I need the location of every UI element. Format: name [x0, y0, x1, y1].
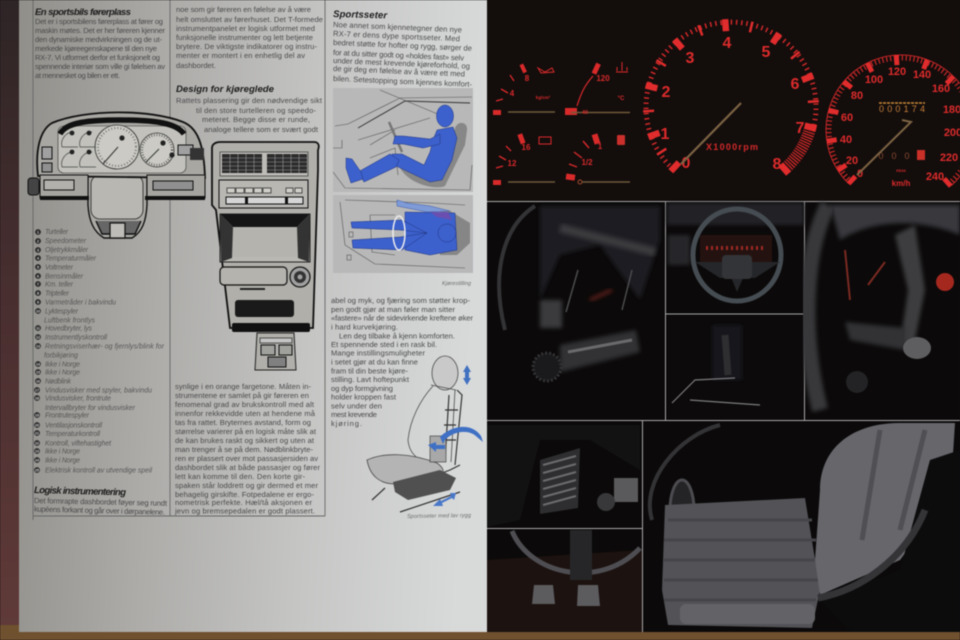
- speed unit label: km/h: [892, 179, 910, 188]
- caption: Sportsseter med lav rygg: Sportsseter med lav rygg: [407, 513, 472, 520]
- gauge: water temperature: 40: [582, 110, 588, 116]
- speedo numbers: 240: [926, 171, 944, 183]
- legend: numbered instrument list: 18: [35, 396, 39, 400]
- text block: seat comfort: holder kroppen fast: [331, 392, 397, 402]
- legend: numbered instrument list: 1: [37, 230, 39, 234]
- text block: seat comfort: og dyp formgivning: [331, 384, 393, 393]
- photo grid lines: [487, 202, 960, 632]
- text block: column two bottom: jevn og bremsepedalen er godt plassert.: [174, 506, 315, 516]
- legend: numbered instrument list: Intervallbryter for vindusvisker: [45, 405, 136, 412]
- gauge: fuel: [566, 133, 630, 184]
- text block: column two bottom: man trenger å se på dem. Nødblinkbryte-: [175, 445, 313, 454]
- gauge: speedometer: [826, 55, 960, 188]
- gauge: fuel: 1: [598, 142, 603, 151]
- gauge: voltmeter: 12: [508, 159, 517, 168]
- steering wheel: [389, 122, 402, 152]
- text block: column two bottom: størrelse varierer på en logisk måte slik at: [175, 427, 317, 436]
- legend: numbered instrument list: Kontroll, viftehastighet: [45, 440, 112, 448]
- speedo numbers: 120: [888, 66, 906, 78]
- speedo numbers: 20: [846, 155, 858, 167]
- legend: numbered instrument list: forbikjøring: [44, 352, 78, 360]
- gauge: water temperature: [565, 62, 630, 116]
- legend: numbered instrument list: Lyktespyler: [45, 308, 79, 316]
- trip counter: [878, 150, 925, 161]
- legend: numbered instrument list: Ikke i Norge: [45, 458, 80, 464]
- text block: sports seats intro: for at du sitter godt og «holdes fast» selv: [333, 48, 464, 62]
- seat frame: [372, 390, 462, 512]
- text block: logisk instrumentering: Det formrapte dashbordet føyer seg rundt: [34, 496, 168, 508]
- text block: intro: merkede kjøreegenskapene til den nye: [35, 44, 157, 53]
- text block: logisk instrumentering: kupéens forkant og går over i dørpanelene.: [34, 505, 165, 517]
- console climate panel: [219, 180, 308, 208]
- legend: numbered instrument list: Varmetråder i bakvindu: [45, 298, 116, 306]
- text block: sports seats intro: [333, 20, 473, 89]
- heading: Design for kjøreglede: Design for kjøreglede: [176, 84, 275, 95]
- photo: pedals and wheel rim: [487, 530, 642, 632]
- text block: column two bottom: de kan brukes raskt og sikkert og uten at: [175, 436, 315, 445]
- speedo minor ticks: [829, 58, 960, 184]
- dial panel: [58, 126, 186, 173]
- gauge: oil pressure: 4: [510, 89, 515, 98]
- legend: numbered instrument list: 15: [36, 370, 40, 374]
- text block: column two bottom: nometrisk perfekte. Hæl/tå aksjonen er: [175, 498, 312, 507]
- seat, side view: [400, 123, 467, 187]
- text block: seat comfort: i hard kurvekjøring.: [331, 322, 398, 332]
- text block: seat comfort: i setet gjør at du kan finne: [331, 358, 418, 366]
- legend: numbered instrument list: 4: [37, 256, 39, 260]
- left page: [19, 0, 488, 632]
- seat outline: [367, 356, 458, 484]
- text block: design intro: til den store turtelleren og speedo-: [196, 106, 316, 115]
- legend: numbered instrument list: [34, 229, 165, 474]
- text block: seat comfort: fram til din beste kjøre-: [331, 366, 408, 376]
- dial: tachometer: [95, 125, 139, 169]
- text block: sports seats intro: bedret støtte for hofter og rygg, sørger de: [333, 38, 472, 53]
- gauge: tachometer: [643, 19, 819, 176]
- tach unit label: X1000rpm: [706, 142, 758, 152]
- legend: numbered instrument list: Frontrutespyler: [45, 412, 90, 420]
- legend: numbered instrument list: 8: [37, 291, 39, 295]
- legend: numbered instrument list: Bensinmåler: [45, 272, 84, 280]
- arrow: backrest recline: [440, 427, 483, 444]
- blue figure from above: [351, 200, 457, 255]
- legend: numbered instrument list: Hovedbryter, lys: [45, 326, 93, 332]
- text block: column two bottom: fenomenal grad av brukskontroll med alt: [175, 400, 315, 409]
- tach needle: [681, 103, 741, 164]
- text block: column two bottom: lett kan komme til den. Den korte gir-: [175, 472, 305, 481]
- text block: column two bottom: behagelig girskifte. Fotpedalene er ergo-: [175, 490, 314, 499]
- legend: numbered instrument list: 11: [36, 326, 40, 330]
- legend: numbered instrument list: 5: [37, 265, 39, 269]
- text block: seat comfort: pen godt gjør at man føler man sitter: [331, 305, 455, 314]
- console base bar: [232, 323, 310, 332]
- text block: column two top: funksjonelle instrumenter og lett betjente: [176, 33, 313, 42]
- car body lines: [333, 90, 472, 190]
- legend: numbered instrument list: Km. teller: [45, 282, 74, 288]
- heading: Sportsseter: Sportsseter: [333, 9, 388, 21]
- tach numbers: 0: [682, 155, 691, 172]
- legend: numbered instrument list: Tripteller: [45, 290, 70, 298]
- seat slider mechanism: [393, 470, 456, 500]
- legend: numbered instrument list: 13: [36, 344, 40, 348]
- speedo numbers: 160: [932, 83, 950, 95]
- tach numbers: 6: [791, 76, 800, 93]
- steering column: [88, 172, 147, 238]
- text block: column two bottom: innenfor rekkevidde uten at hendene må: [175, 409, 316, 418]
- speedo numbers: 40: [840, 134, 852, 146]
- legend: numbered instrument list: 2: [37, 239, 39, 243]
- heading: En sportsbils førerplass: En sportsbils førerplass: [35, 7, 131, 18]
- legend: numbered instrument list: 19: [35, 413, 39, 417]
- gauge: oil pressure: kg/cm²: [536, 95, 551, 100]
- tach red zone: [785, 127, 810, 169]
- text block: intro: Det er i sportsbilens førerplass at fører og: [35, 17, 163, 26]
- speedo outer ring: [826, 55, 960, 186]
- legend: numbered instrument list: 12: [36, 335, 40, 339]
- text block: column two top: [176, 5, 323, 70]
- text block: intro: at mennesket og bilen er ett.: [35, 71, 120, 80]
- legend: numbered instrument list: 23: [35, 449, 39, 453]
- text block: seat comfort: kjøring.: [331, 419, 362, 428]
- trip counter: 0: [904, 151, 910, 161]
- text block: seat comfort: Et spennende sted i en rask bil.: [331, 340, 437, 349]
- tach major ticks: [643, 19, 819, 176]
- steering wheel ring: [393, 216, 405, 250]
- legend: numbered instrument list: Luftbenk frontlys: [44, 318, 96, 324]
- legend: numbered instrument list: 24: [35, 458, 39, 462]
- legend: numbered instrument list: Nødblink: [45, 378, 72, 386]
- legend: numbered instrument list: 6: [37, 274, 39, 278]
- lumbar block: [430, 436, 446, 462]
- gauge: voltmeter: 16: [522, 143, 531, 152]
- legend: numbered instrument list: Retningsviserhær- og fjernlys/blink for: [45, 344, 165, 350]
- tach numbers: 3: [686, 50, 695, 67]
- speedo numbers: 80: [851, 90, 863, 102]
- text block: logisk instrumentering: [34, 496, 168, 517]
- gauge: water temperature: 120: [596, 74, 610, 83]
- speedo needle: [857, 120, 911, 175]
- console dark slot: [235, 300, 294, 317]
- tach numbers: 2: [662, 84, 671, 101]
- illustration: seat frame with arrows: [367, 356, 483, 512]
- speedo numbers: 60: [841, 112, 853, 124]
- speedo numbers: 0: [857, 168, 863, 180]
- legend: numbered instrument list: Vindusvisker, frontrute: [45, 396, 111, 402]
- text block: intro: RX-7. Vi utformet derfor et funksjonelt og: [35, 53, 160, 62]
- legend: numbered instrument list: 22: [35, 441, 39, 445]
- text block: column two top: menter er montert i en enhetlig del av: [176, 51, 305, 60]
- tach numbers: 1: [661, 126, 670, 143]
- text block: sports seats intro: RX-7 er dens dype sportsseter. Med: [333, 29, 460, 43]
- speedo numbers: [840, 66, 960, 183]
- tach numbers: 7: [796, 120, 805, 137]
- console vents: [220, 152, 308, 176]
- speedo major ticks: [826, 55, 955, 188]
- legend: numbered instrument list: Ikke i Norge: [45, 362, 80, 368]
- photo: seat: [650, 423, 960, 632]
- legend: numbered instrument list: 21: [35, 431, 39, 435]
- text block: column two top: noe som gir føreren en følelse av å være: [176, 5, 311, 14]
- legend: numbered instrument list: 14: [36, 362, 40, 366]
- legend: numbered instrument list: 10: [36, 309, 40, 313]
- tach numbers: 5: [762, 44, 771, 61]
- trip counter: 0: [891, 151, 897, 161]
- photo: wheel front view: [667, 203, 804, 301]
- text block: seat comfort: mest krevende: [331, 410, 377, 419]
- text block: column two bottom: ren er plassert over mot passasjersiden av: [175, 454, 318, 463]
- gauge: voltmeter: [493, 133, 555, 185]
- text block: column two bottom: spaken står loddrett og gir dermed et mer: [175, 481, 318, 490]
- column rules: [33, 0, 325, 520]
- caption: Kjørestilling: Kjørestilling: [442, 281, 472, 287]
- gauge: water temperature: °C: [618, 96, 625, 102]
- text block: sports seats intro: de gir deg en følelse av å være ett med: [333, 64, 465, 79]
- legend: numbered instrument list: Instrumentlyskontroll: [45, 334, 107, 342]
- legend: numbered instrument list: 16: [36, 379, 40, 383]
- text block: seat comfort: stilling. Lavt hoftepunkt: [331, 375, 410, 384]
- odometer: 000174: [879, 104, 925, 114]
- speedo numbers: 220: [940, 152, 958, 164]
- seat, top view: [440, 211, 470, 255]
- text block: intro: spennende interiør som ville gi følelsen av: [35, 62, 165, 71]
- gauge: fuel: 1/2: [581, 158, 593, 167]
- legend: numbered instrument list: 17: [35, 388, 39, 392]
- photo: steering wheel and stalks: [499, 206, 660, 381]
- text block: column two bottom: synlige i en orange fargetone. Måten in-: [175, 382, 311, 391]
- text block: seat comfort: selv under den: [331, 402, 382, 410]
- legend: numbered instrument list: 7: [37, 282, 39, 286]
- legend: numbered instrument list: 3: [37, 248, 39, 252]
- text block: column two bottom: [174, 382, 320, 516]
- tach minor ticks: [646, 22, 816, 169]
- text block: seat comfort: Mange instillingsmuligheter: [331, 348, 425, 358]
- gauge: oil pressure: 8: [525, 74, 530, 83]
- text block: seat comfort: [331, 296, 473, 428]
- tach numbers: 4: [723, 35, 732, 52]
- arrow: seat slide: [433, 493, 456, 506]
- legend: numbered instrument list: 9: [37, 300, 39, 304]
- legend: numbered instrument list: Voltmeter: [45, 264, 74, 272]
- gauge: oil pressure: [493, 64, 555, 115]
- text block: intro: maskin møtes. Det er her føreren kjenner: [35, 26, 165, 35]
- lower control strip: [28, 145, 205, 200]
- text block: sports seats intro: Noe annet som kjennetegner den nye: [333, 20, 462, 34]
- legend: numbered instrument list: Elektrisk kontroll av utvendige speil: [45, 468, 152, 474]
- instrument hood: [37, 112, 205, 178]
- legend: numbered instrument list: Temperaturmåler: [45, 254, 97, 262]
- legend: numbered instrument list: Temperaturkontroll: [45, 431, 100, 438]
- photo: side vent and knob: [487, 425, 640, 527]
- text block: sports seats intro: under de mest krevende kjøreforhold, og: [333, 56, 470, 71]
- legend: numbered instrument list: Ventilasjonskontroll: [45, 422, 102, 430]
- dial: speedometer: [140, 133, 175, 167]
- text block: design intro: [176, 96, 323, 134]
- text block: column two top: dashbordet.: [176, 61, 216, 70]
- legend: numbered instrument list: 20: [35, 423, 39, 427]
- text block: sports seats intro: bilen. Setestopping som kjennes komfort-: [333, 74, 473, 89]
- text block: design intro: analoge tellere som er svært godt: [204, 125, 319, 134]
- tach numbers: [661, 35, 805, 173]
- text block: seat comfort: Len deg tilbake å kjenn komforten.: [339, 332, 455, 340]
- car outline: [340, 200, 465, 268]
- blue driver figure: [346, 105, 457, 183]
- illustration: driver top view: [333, 195, 473, 273]
- text block: seat comfort: «fastere» når de sidevirkende kreftene øker: [331, 314, 473, 322]
- legend: numbered instrument list: Ikke i Norge: [45, 448, 80, 456]
- illustration: shifter panel: [255, 333, 296, 370]
- text block: intro: den dynamiske medvirkningen og de ut-: [35, 35, 162, 44]
- hood dark band: [60, 120, 184, 134]
- photo: wheel side view with red button: [808, 205, 960, 410]
- text block: column two top: brytere. De viktigste indikatorer og instru-: [176, 42, 317, 51]
- legend: numbered instrument list: Ikke i Norge: [45, 370, 80, 376]
- legend: numbered instrument list: Vindusvisker med spyler, bakvindu: [45, 388, 152, 394]
- text block: design intro: meteret. Begge disse er runde,: [202, 115, 310, 124]
- tach numbers: 8: [773, 156, 782, 173]
- legend: numbered instrument list: Speedometer: [45, 238, 87, 245]
- heading: Logisk instrumentering: Logisk instrumentering: [34, 485, 126, 498]
- text block: seat comfort: abel og myk, og fjæring som støtter krop-: [331, 296, 470, 305]
- text block: design intro: Rattets plassering gir den nødvendige sikt: [176, 96, 323, 105]
- illustration: centre console: [212, 142, 319, 332]
- console ashtray and lighter: [220, 267, 310, 290]
- illustration: driver side view: [333, 88, 473, 192]
- illustration: dashboard instrument cluster: [28, 112, 205, 238]
- right page: dark instrument photo: [487, 0, 960, 632]
- legend: numbered instrument list: 25: [35, 468, 39, 472]
- text block: intro: [35, 17, 165, 80]
- text block: column two top: instrumentpanelet er logisk utformet med: [176, 24, 315, 33]
- trip counter: 0: [878, 151, 884, 161]
- text block: column two bottom: tas fra rattet. Bryternes avstand, form og: [175, 418, 311, 427]
- legend: numbered instrument list: Oljetrykkmåler: [45, 246, 89, 254]
- small gauges: [62, 131, 96, 167]
- text block: column two bottom: strumentene er samlet på gir føreren en: [175, 391, 309, 400]
- small code label: FE04: [896, 168, 907, 173]
- arrow: headrest up and down: [463, 365, 471, 385]
- photo: gear lever: [668, 316, 803, 419]
- text block: column two top: helt omsluttet av førerhuset. Det T-formede: [176, 15, 323, 24]
- speedo numbers: 140: [913, 69, 931, 81]
- text block: column two bottom: dashbordet slik at både passasjer og fører: [175, 463, 320, 472]
- console radio recess: [220, 214, 310, 262]
- legend: numbered instrument list: Turteller: [45, 229, 69, 236]
- arrow: lumbar support: [428, 442, 445, 452]
- speedo numbers: 100: [865, 74, 883, 86]
